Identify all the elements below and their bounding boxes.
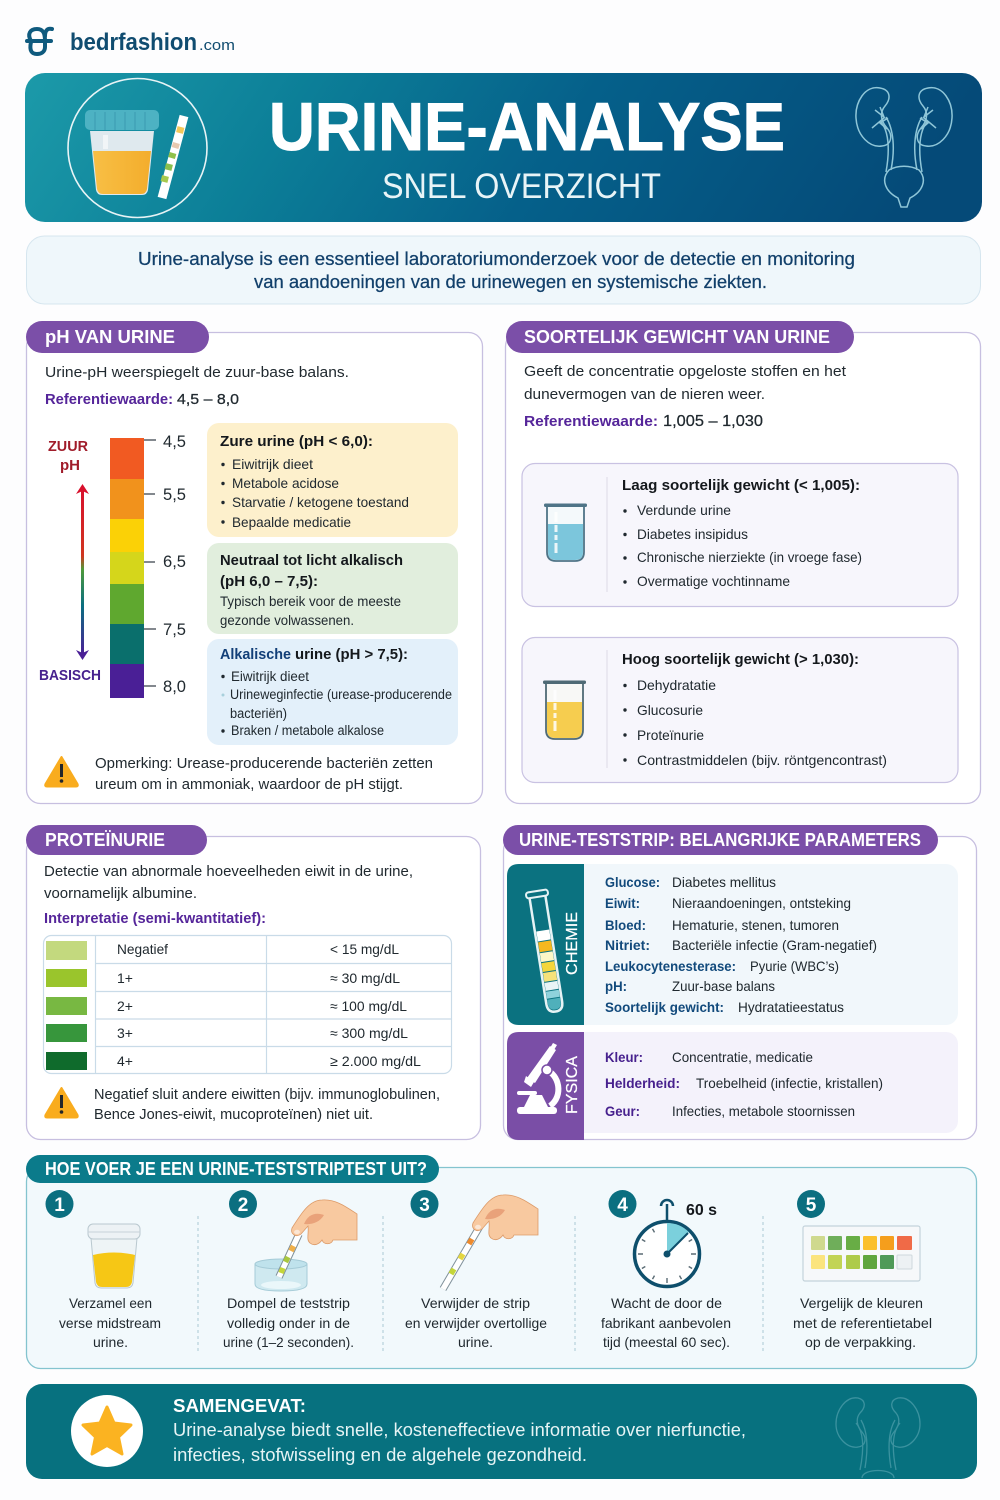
pH colour scale: 7,5 [163,620,186,639]
heading: pH van urine [26,321,209,353]
card: zure urine: Zure urine (pH < 6,0): [220,433,373,450]
step 2: Dompel de teststrip [227,1295,350,1311]
physical parameters: Geur: [605,1103,640,1119]
step 2: 2 [238,1195,248,1216]
physical parameters: Concentratie, medicatie [672,1049,813,1065]
table: semi-quantitative interpretation: 3+ [117,1025,133,1041]
heading: test procedure: HOE VOER JE EEN URINE-TESTSTRIPTEST UIT? [45,1159,427,1179]
icon: urine cup and test strip [68,78,207,218]
step dividers [198,1216,763,1352]
step 2 [223,1190,357,1350]
chemistry parameters [605,874,877,1015]
card: laag soortelijk gewicht: Verdunde urine [637,502,731,518]
intro text: Referentiewaarde: [45,391,173,408]
heading: soortelijk gewicht: SOORTELIJK GEWICHT VAN URINE [524,327,830,347]
summary text: Urine-analyse biedt snelle, kosteneffectieve informatie over nierfunctie, [173,1420,746,1440]
panel: proteinurie [26,825,480,1140]
step 5: 5 [806,1195,817,1216]
card: hoog soortelijk gewicht: Glucosurie [637,702,703,718]
step 3: Verwijder de strip [421,1295,530,1311]
intro text [44,863,413,927]
icon: test tube [526,889,566,1013]
heading: proteinurie [26,825,207,855]
table: semi-quantitative interpretation: 4+ [117,1053,133,1069]
step 5: Vergelijk de kleuren [800,1295,923,1311]
pH colour scale: 5,5 [163,485,186,504]
chemistry parameters: Leukocytenesterase: [605,958,736,974]
heading: teststrip: URINE-TESTSTRIP: BELANGRIJKE PARAMETERS [519,830,921,850]
intro text box [26,236,980,304]
icon: stopwatch [634,1200,700,1286]
chemistry parameters: Diabetes mellitus [672,874,776,890]
note [94,1087,440,1123]
intro text: Interpretatie (semi-kwantitatief): [44,910,266,927]
icon: colour reference chart [803,1226,920,1281]
step 4: Wacht de door de [611,1295,722,1311]
step 2: urine (1–2 seconden). [223,1334,354,1350]
intro text: Urine-pH weerspiegelt de zuur-base balans. [45,364,349,381]
card: zure urine [207,423,458,537]
chemistry parameters: Hematurie, stenen, tumoren [672,917,839,933]
step 4: fabrikant aanbevolen [601,1315,731,1331]
icon: microscope [517,1043,558,1114]
table: semi-quantitative interpretation: ≥ 2.000 mg/dL [330,1053,421,1069]
heading: proteinurie: PROTEÏNURIE [45,830,165,850]
step 4: tijd (meestal 60 sec). [603,1334,730,1350]
step 2: volledig onder in de [227,1315,350,1331]
card: neutraal tot licht alkalisch: gezonde volwassenen. [220,612,354,628]
pH scale labels: pH [60,457,80,474]
brand name: .com [199,37,235,54]
intro text: voornamelijk albumine. [44,885,197,902]
card: laag soortelijk gewicht [522,464,958,606]
step 1: Verzamel een [69,1295,152,1311]
heading: soortelijk gewicht [506,321,854,353]
icon: warning [45,757,78,786]
card: hoog soortelijk gewicht: Hoog soortelijk gewicht (> 1,030): [622,651,859,668]
pH colour scale: 6,5 [163,552,186,571]
step 1: urine. [93,1334,128,1350]
card: laag soortelijk gewicht: Chronische nierziekte (in vroege fase) [637,549,862,565]
icon: faint kidneys [836,1398,920,1478]
pH scale labels: ZUUR [48,438,88,455]
note: Opmerking: Urease-producerende bacteriën zetten [95,755,433,772]
table: semi-quantitative interpretation: Negatief [117,941,168,957]
step 3: en verwijder overtollige [405,1315,547,1331]
card: hoog soortelijk gewicht: Dehydratatie [637,677,716,693]
card: alkalische urine: bacteriën) [230,706,287,721]
icon: hand [473,1195,538,1240]
step 1 [46,1190,161,1350]
step 4: 4 [617,1195,628,1216]
card: zure urine: Starvatie / ketogene toestand [232,494,409,510]
pH colour scale: 8,0 [163,677,186,696]
icon: beaker with yellow liquid [543,680,586,739]
step 3: 3 [419,1195,430,1216]
timer label: 60 s [686,1202,717,1219]
chemistry parameters: pH: [605,978,627,994]
step 5: met de referentietabel [793,1315,932,1331]
chemistry parameters: Nieraandoeningen, ontsteking [672,895,851,911]
banner [25,73,982,222]
card: zure urine: Eiwitrijk dieet [232,456,313,472]
card: hoog soortelijk gewicht: Proteïnurie [637,727,704,743]
logo [27,29,235,56]
note: Negatief sluit andere eiwitten (bijv. immunoglobulinen, [94,1087,440,1103]
chemistry parameters: Glucose: [605,874,660,890]
label: fysica: FYSICA [564,1056,581,1114]
note: Bence Jones-eiwit, mucoproteïnen) niet uit. [94,1107,373,1123]
summary text [173,1396,746,1465]
intro text box: van aandoeningen van de urinewegen en systemische ziekten. [254,272,767,292]
icon: warning [45,1088,78,1118]
table: semi-quantitative interpretation: ≈ 100 mg/dL [330,998,407,1014]
table: semi-quantitative interpretation: ≈ 30 mg/dL [330,970,400,986]
card: alkalische urine [207,639,458,745]
panel: pH van urine [26,321,482,804]
card: hoog soortelijk gewicht [522,638,958,782]
table: semi-quantitative interpretation: ≈ 300 mg/dL [330,1025,408,1041]
pH scale labels [39,438,101,684]
icon: kidneys and bladder [856,88,952,207]
chemistry parameters: Soortelijk gewicht: [605,999,724,1015]
card: laag soortelijk gewicht: Laag soortelijk gewicht (< 1,005): [622,477,860,494]
icon: star [71,1395,143,1467]
pH scale labels: BASISCH [39,667,101,684]
card: alkalische urine: Eiwitrijk dieet [231,669,309,684]
step 3: urine. [458,1334,493,1350]
summary banner [26,1384,977,1479]
pH colour scale: 4,5 [163,432,186,451]
arrow: acid to basic [76,484,89,660]
chemistry parameters: Bloed: [605,917,646,933]
step 1: verse midstream [59,1315,161,1331]
intro text: 1,005 – 1,030 [663,413,763,430]
heading: pH van urine: pH VAN URINE [45,327,175,347]
card: laag soortelijk gewicht: Diabetes insipidus [637,526,748,542]
title: URINE-ANALYSE [269,89,785,165]
chemistry parameters: Eiwit: [605,895,640,911]
intro text [45,364,349,408]
card: neutraal tot licht alkalisch: Typisch bereik voor de meeste [220,593,401,609]
block: chemie [507,864,958,1025]
intro text [524,363,847,430]
physical parameters: Infecties, metabole stoornissen [672,1103,855,1119]
card: alkalische urine: Urineweginfectie (urease-producerende [230,687,452,702]
intro text: Referentiewaarde: [524,413,658,430]
card: neutraal tot licht alkalisch [207,543,458,634]
chemistry parameters: Pyurie (WBC’s) [750,958,839,974]
physical parameters: Troebelheid (infectie, kristallen) [696,1075,883,1091]
note [95,755,433,793]
card: alkalische urine: Braken / metabole alkalose [231,723,384,738]
heading: teststrip [503,825,938,855]
physical parameters [605,1049,883,1119]
card: zure urine: Metabole acidose [232,475,339,491]
icon: logo mark [27,29,52,54]
block: fysica [507,1032,958,1140]
card: alkalische urine: Alkalische [220,646,291,663]
step 5: op de verpakking. [805,1334,916,1350]
chemistry parameters: Hydratatieestatus [738,999,844,1015]
table: semi-quantitative interpretation: 2+ [117,998,133,1014]
step 4 [601,1190,731,1350]
intro text box: Urine-analyse is een essentieel laboratoriumonderzoek voor de detectie en monitoring [138,249,855,269]
chemistry parameters: Zuur-base balans [672,978,775,994]
icon: dish and strip [255,1234,307,1291]
intro text: dunevermogen van de nieren weer. [524,386,765,403]
intro text: Geeft de concentratie opgeloste stoffen en het [524,363,847,380]
table: semi-quantitative interpretation [44,936,452,1074]
intro text: 4,5 – 8,0 [177,391,239,408]
label: chemie: CHEMIE [564,912,581,975]
brand name: bedrfashion [70,29,197,56]
card: hoog soortelijk gewicht: Contrastmiddelen (bijv. röntgencontrast) [637,752,887,768]
panel: soortelijk gewicht [506,321,980,804]
subtitle: SNEL OVERZICHT [382,167,661,206]
note: ureum om in ammoniak, waardoor de pH stijgt. [95,776,403,793]
card: zure urine: Bepaalde medicatie [232,514,351,530]
panel: test procedure [26,1155,976,1368]
icon: strip [443,1226,480,1289]
physical parameters: Helderheid: [605,1075,680,1091]
step 3 [405,1190,547,1350]
table: semi-quantitative interpretation: < 15 mg/dL [330,941,399,957]
intro text: Detectie van abnormale hoeveelheden eiwit in de urine, [44,863,413,880]
icon: urine cup [88,1224,140,1288]
physical parameters: Kleur: [605,1049,643,1065]
card: alkalische urine: urine (pH > 7,5): [295,646,408,663]
chemistry parameters: Bacteriële infectie (Gram-negatief) [672,937,877,953]
summary text: SAMENGEVAT: [173,1396,306,1416]
chemistry parameters: Nitriet: [605,937,650,953]
icon: beaker with blue liquid [544,504,587,561]
card: laag soortelijk gewicht: Overmatige vochtinname [637,573,790,589]
panel: urine-teststrip parameters [503,825,976,1140]
summary text: infecties, stofwisseling en de algehele gezondheid. [173,1445,587,1465]
step 5 [793,1190,932,1350]
icon: hand [292,1200,357,1245]
heading: test procedure [26,1155,439,1183]
table: semi-quantitative interpretation: 1+ [117,970,133,986]
card: neutraal tot licht alkalisch: (pH 6,0 – 7,5): [220,573,318,590]
step 1: 1 [54,1195,65,1216]
card: neutraal tot licht alkalisch: Neutraal tot licht alkalisch [220,552,403,569]
pH colour scale [110,432,186,698]
